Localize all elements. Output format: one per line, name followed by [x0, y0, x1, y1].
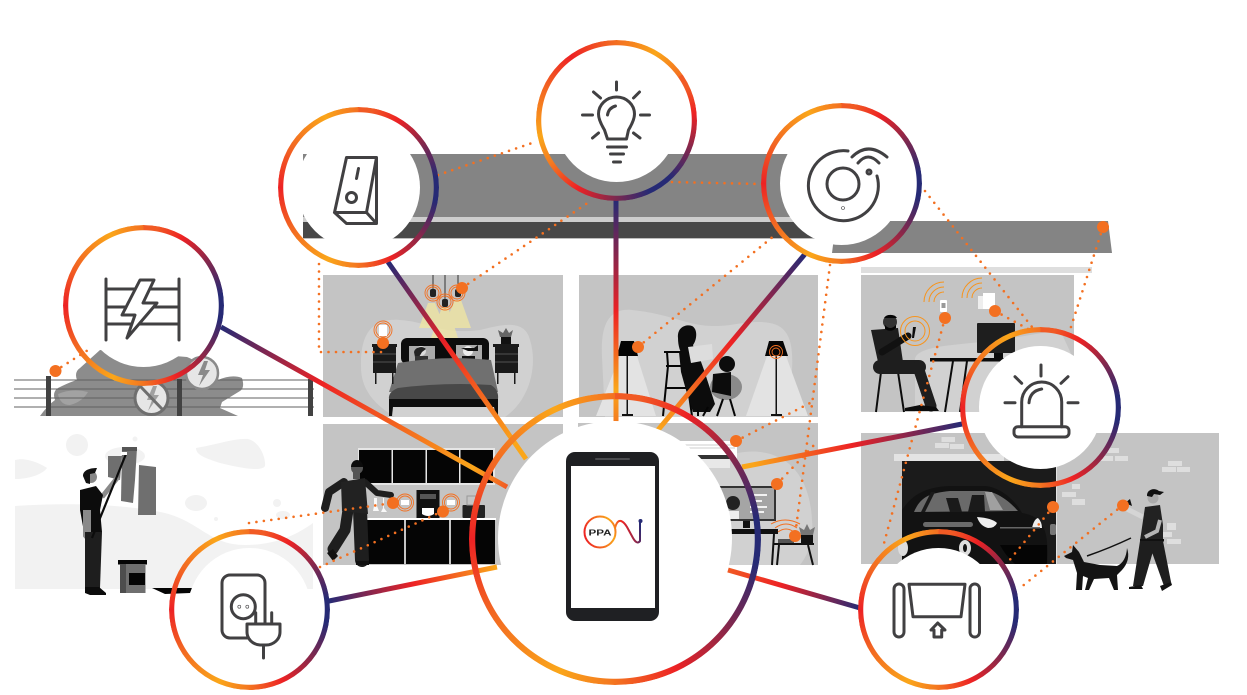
circle: wall switch	[278, 107, 439, 268]
phone screen with logo	[571, 466, 654, 608]
circle: alarm beacon	[960, 327, 1121, 488]
garage and car	[861, 433, 1219, 564]
logo: PPA ON: PPA	[588, 528, 612, 538]
circle: electric fence	[63, 225, 224, 386]
logo: PPA ON	[584, 516, 642, 548]
room: bedroom	[323, 275, 563, 417]
main roof	[303, 154, 835, 239]
upper right eave	[861, 267, 1092, 273]
icon: light bulb	[581, 80, 651, 164]
phone	[566, 452, 659, 621]
central phone hub	[469, 393, 761, 685]
room: kitchen	[323, 424, 563, 565]
woman walking dog	[1064, 489, 1172, 591]
icon: smart plug	[220, 574, 282, 660]
outdoor wall background	[15, 434, 313, 589]
circle: smoke detector	[761, 103, 922, 264]
circle: smart plug	[169, 529, 330, 690]
room: upper right study	[861, 275, 1074, 412]
circle: garage door control	[858, 529, 1019, 690]
icon: alarm beacon	[1004, 364, 1080, 438]
electric fence and bushes	[14, 350, 314, 416]
icon: smoke detector with wifi	[806, 147, 889, 222]
icon: car from above	[892, 582, 981, 638]
icon: switch	[332, 156, 378, 225]
dotted connectors	[55, 142, 1123, 588]
circle: light bulb	[536, 40, 697, 201]
room: home office	[578, 423, 818, 565]
room: living room	[579, 275, 818, 417]
connector lines to phone	[221, 200, 962, 608]
orange sensor dots	[50, 221, 1129, 542]
side roof	[832, 221, 1112, 253]
icon: electric fence	[104, 278, 180, 342]
painter with roller	[80, 447, 192, 595]
